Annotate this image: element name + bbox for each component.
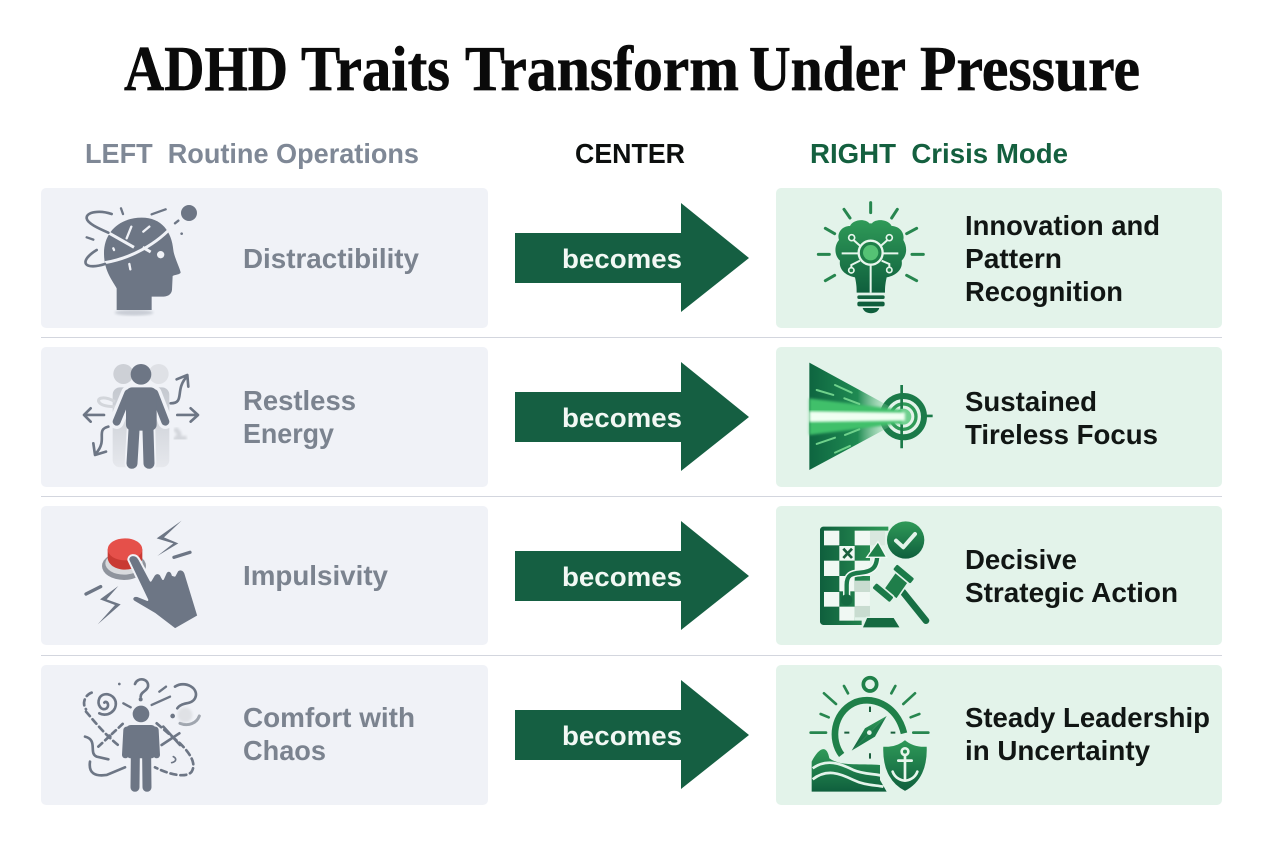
label: innovation: Innovation and [965,210,1160,241]
icon: restless figure [84,364,198,467]
column heading: left: LEFT Routine Operations [85,138,419,169]
label: sustained focus [965,386,1158,450]
arrow: becomes: becomes [562,403,682,433]
title: Transform [465,33,739,104]
panel: impulsivity [41,506,488,645]
arrow: becomes [515,362,749,471]
panel: steady leadership [776,665,1222,805]
icon: figure among chaos [84,679,199,787]
panel: comfort with chaos [41,665,488,805]
label: innovation [965,210,1160,307]
label: decisive action [965,544,1178,608]
label: sustained focus: Tireless Focus [965,419,1158,450]
label: decisive action: Strategic Action [965,577,1178,608]
label: steady leadership: Steady Leadership [965,702,1210,733]
panel: distractibility [41,188,488,328]
label: distractibility: Distractibility [243,243,419,274]
icon: circuit brain bulb [818,203,923,313]
label: restless energy: Restless [243,385,356,416]
title [124,33,1140,104]
row 3: Impulsivity to Decisive Action [41,506,1222,645]
icon: distracted head [86,205,197,316]
panel: sustained focus [776,347,1222,487]
panel: decisive action [776,506,1222,645]
label: comfort with chaos [243,702,415,766]
column heading: right: RIGHT Crisis Mode [810,138,1068,169]
label: steady leadership [965,702,1210,766]
row 1: Distractibility to Innovation [41,188,1222,328]
icon: red button press [86,521,198,629]
label: innovation: Recognition [965,276,1123,307]
label: sustained focus: Sustained [965,386,1097,417]
icon: beam and target [809,363,933,470]
title: ADHD [124,33,288,104]
icon: chessboard, check and gavel [820,521,926,628]
label: steady leadership: in Uncertainty [965,735,1150,766]
arrow: becomes: becomes [562,562,682,592]
label: decisive action: Decisive [965,544,1077,575]
title: Under [749,33,906,104]
label: restless energy: Energy [243,418,334,449]
arrow: becomes: becomes [562,244,682,274]
arrow: becomes: becomes [562,721,682,751]
panel: innovation [776,188,1222,328]
arrow: becomes [515,521,749,630]
label: restless energy [243,385,356,449]
title: Traits [301,33,450,104]
label: impulsivity: Impulsivity [243,560,388,591]
label: innovation: Pattern [965,243,1062,274]
row 2: Restless Energy to Sustained Focus [41,347,1222,487]
arrow: becomes [515,680,749,789]
label: comfort with chaos: Comfort with [243,702,415,733]
panel: restless energy [41,347,488,487]
label: comfort with chaos: Chaos [243,735,326,766]
title: Pressure [920,33,1140,104]
row 4: Comfort with Chaos to Steady Leadership [41,665,1222,805]
icon: compass, waves and anchor shield [811,678,928,792]
column heading: center: CENTER [575,138,685,169]
arrow: becomes [515,203,749,312]
